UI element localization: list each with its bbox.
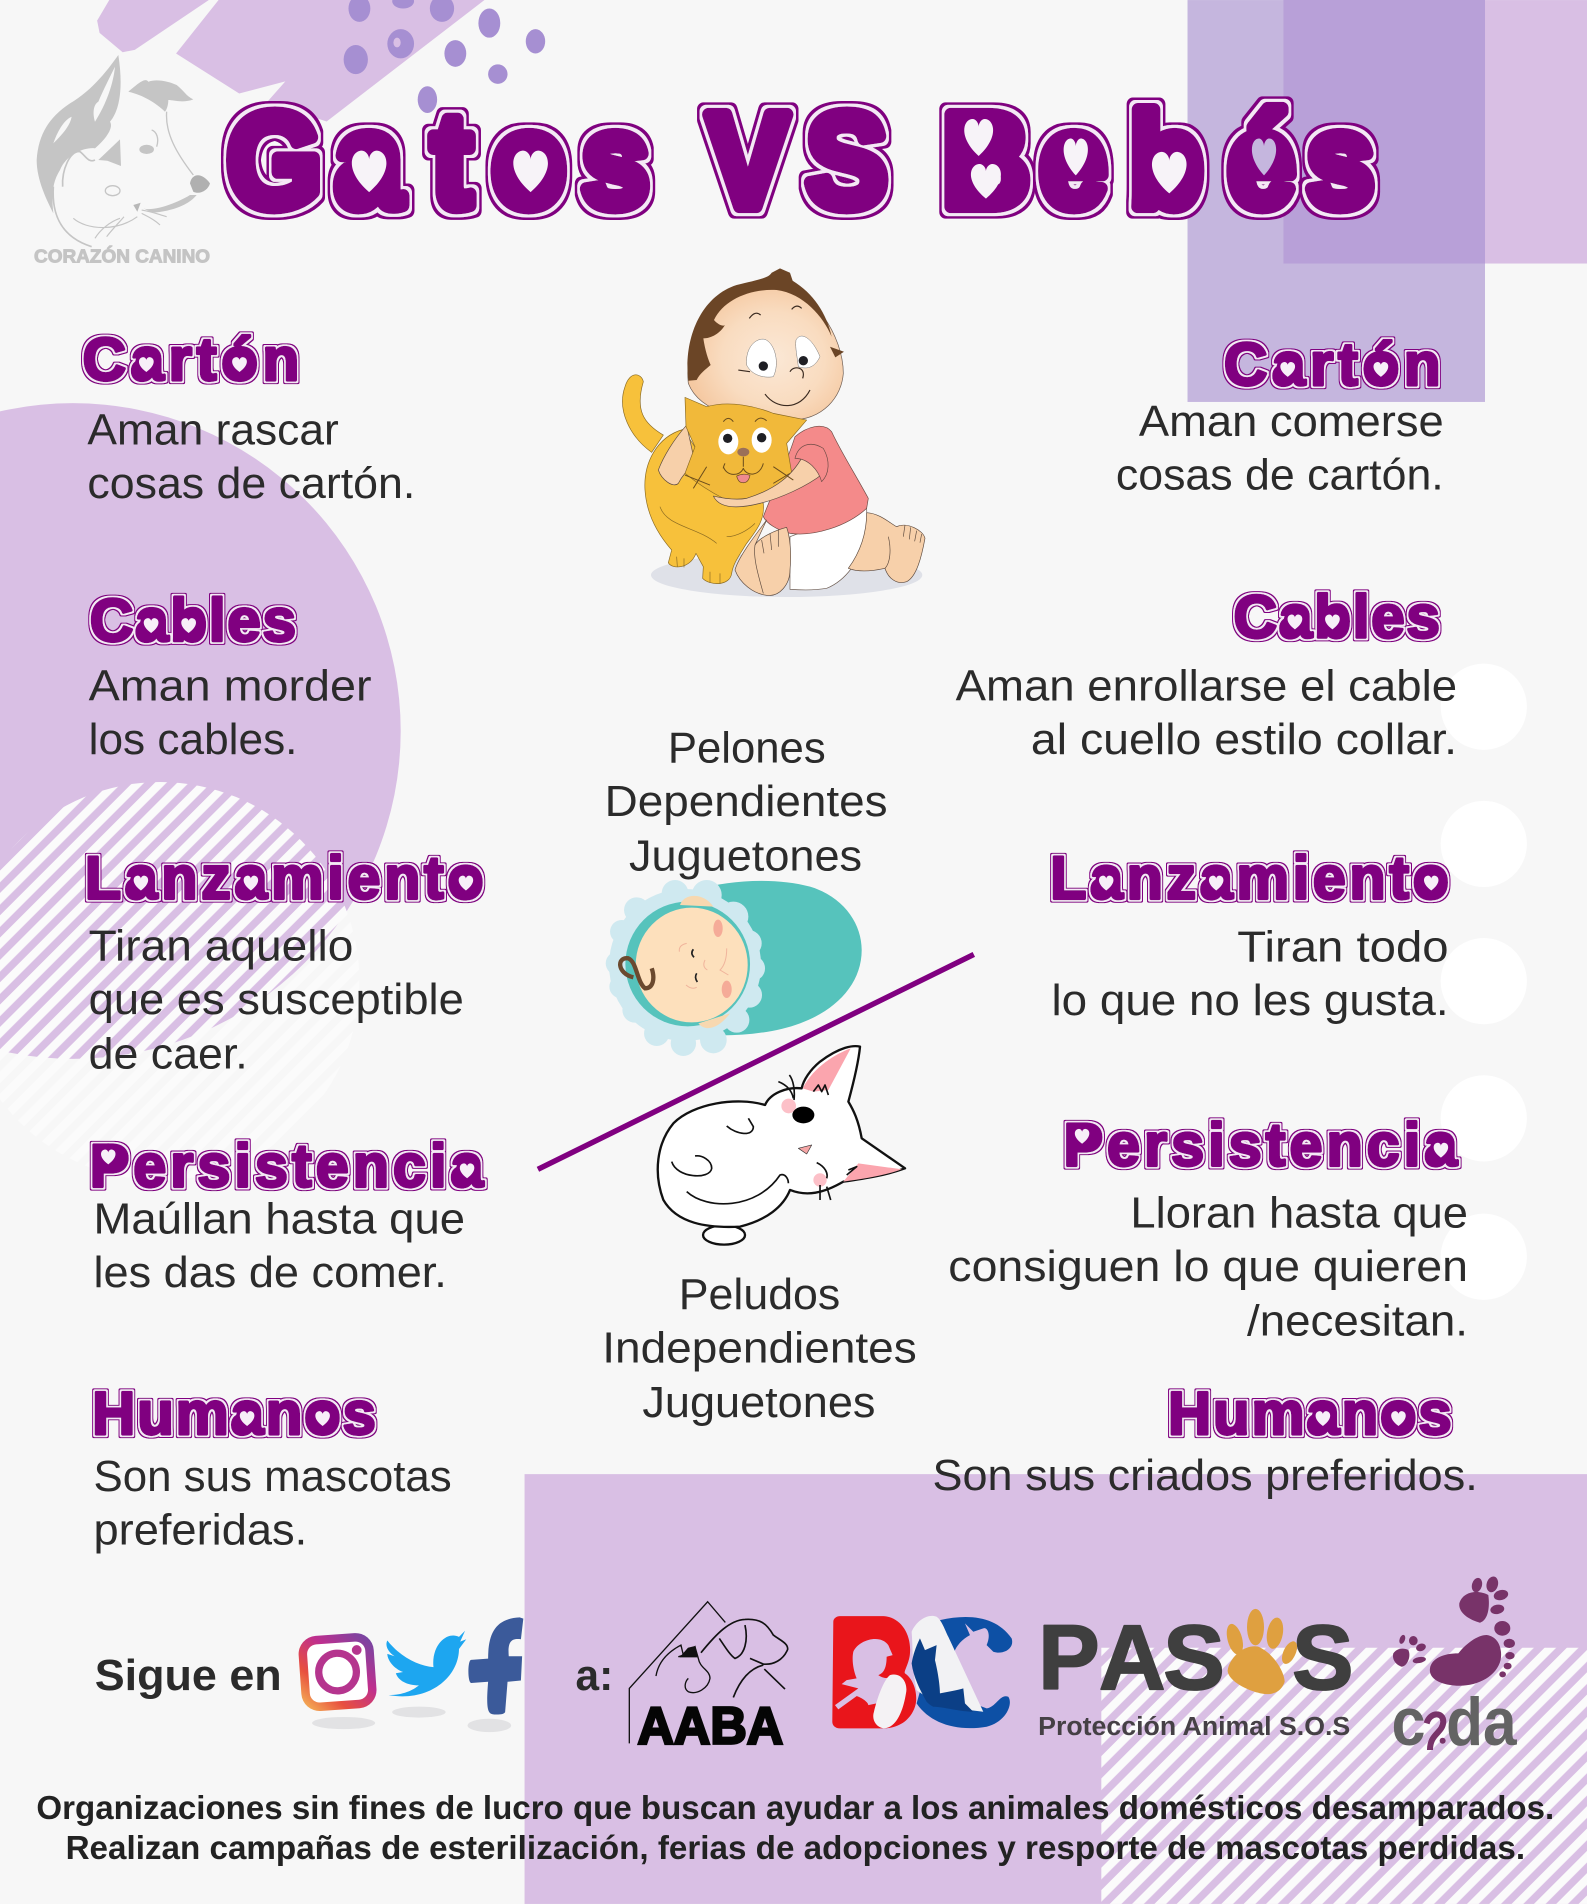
right column: Lanzamiento: Tiran todo (1237, 923, 1449, 972)
logo: Corazón Canino (34, 55, 210, 266)
left column: Cartón (83, 325, 415, 508)
right column: Cables: Aman enrollarse el cable (956, 662, 1457, 711)
logo: PASOS: PASS (1038, 1605, 1353, 1709)
cat tail (622, 375, 663, 452)
illustration: baby hugging cat (622, 268, 925, 597)
cat head (685, 397, 807, 500)
left column: Persistencia: Maúllan hasta que (93, 1195, 465, 1244)
title: Gatos (227, 86, 649, 236)
decoration: large lilac circle with striped circle (0, 403, 401, 1180)
left column: Humanos: preferidas. (93, 1506, 307, 1555)
decoration: top-left brush strokes and dots (97, 0, 545, 121)
right column: Lanzamiento (1050, 844, 1449, 1025)
icon: paw (1224, 1609, 1300, 1694)
decoration: top-right rectangles (1188, 0, 1587, 402)
baby hair (687, 268, 832, 381)
logo: BC (832, 1616, 1012, 1728)
left column: Cables: los cables. (89, 715, 297, 764)
title: Bebés (942, 86, 1374, 236)
footer text: Realizan campañas de esterilización, ferias de adopciones y resporte de mascotas perdidas. (66, 1830, 1525, 1867)
divider line (538, 954, 974, 1169)
right column: Humanos (933, 1380, 1478, 1500)
left column: Lanzamiento: que es susceptible (89, 975, 464, 1024)
decoration: bottom panel (525, 1474, 1587, 1904)
logo: Corazón Canino: CORAZÓN CANINO (34, 245, 210, 266)
center text: babies traits (605, 724, 888, 881)
left column: Lanzamiento (85, 844, 484, 1079)
baby eyes and mouth (746, 339, 776, 377)
right column: Persistencia (948, 1111, 1468, 1346)
cat body (645, 429, 764, 584)
left column: Humanos: Son sus mascotas (93, 1452, 452, 1501)
center text: cats traits: Juguetones (642, 1378, 875, 1427)
logo: PASOS: Protección Animal S.O.S (1038, 1713, 1350, 1741)
logo: AABA (629, 1602, 788, 1756)
dog ear (128, 80, 193, 112)
baby right arm (713, 452, 823, 507)
left column: Persistencia: Persistencia (90, 1132, 484, 1200)
title: VS (707, 86, 887, 236)
right column: Humanos: Humanos (1168, 1380, 1452, 1447)
right column: Cables: Cables (1234, 582, 1440, 651)
right column: Cartón: Cartón (1224, 330, 1441, 398)
left column: Cables: Cables (90, 586, 296, 654)
right column: Persistencia: Persistencia (1064, 1111, 1458, 1179)
left column: Lanzamiento: Tiran aquello (89, 921, 353, 970)
right column: Cables: al cuello estilo collar. (1031, 715, 1457, 764)
center text: babies traits: Juguetones (629, 832, 862, 881)
right column: Lanzamiento: Lanzamiento (1050, 844, 1449, 912)
logo: AABA: AABA (637, 1698, 783, 1756)
icon: twitter (386, 1631, 466, 1718)
follow label: Sigue en (95, 1651, 282, 1700)
right column: Lanzamiento: lo que no les gusta. (1052, 976, 1449, 1025)
icon: instagram (297, 1632, 378, 1729)
baby left foot (735, 520, 791, 595)
baby shirt (763, 426, 868, 534)
right column: Cables (956, 582, 1457, 764)
left column: Cartón: Aman rascar (87, 405, 339, 454)
logo: cida: da (1446, 1684, 1518, 1760)
cat (98, 139, 121, 166)
icon: facebook (467, 1617, 523, 1732)
right column: Cartón (1116, 330, 1444, 499)
left column: Cables: Aman morder (89, 662, 372, 711)
left column: Persistencia (90, 1132, 484, 1297)
logo: cida (1392, 1575, 1518, 1760)
dog lines (152, 112, 193, 175)
footer text: Organizaciones sin fines de lucro que buscan ayudar a los animales domésticos desamparados. (36, 1790, 1554, 1827)
baby head (688, 282, 843, 421)
decoration: white circles on right (1441, 664, 1527, 1300)
right column: Persistencia: /necesitan. (1247, 1297, 1468, 1346)
baby right leg (848, 513, 925, 583)
label: a: a: (576, 1651, 613, 1700)
left column: Lanzamiento: de caer. (89, 1030, 248, 1079)
left column: Humanos (92, 1380, 452, 1555)
center text: cats traits: Peludos (679, 1270, 840, 1319)
logo: cida: c (1392, 1684, 1426, 1760)
center text: cats traits: Independientes (602, 1323, 917, 1372)
left column: Persistencia: les das de comer. (93, 1248, 447, 1297)
left column: Cartón: Cartón (83, 325, 299, 393)
right column: Persistencia: Lloran hasta que (1130, 1189, 1468, 1238)
baby left arm (658, 425, 695, 485)
baby diaper (790, 508, 867, 590)
cat face (718, 429, 738, 454)
center text: babies traits: Dependientes (605, 777, 888, 826)
footer text (36, 1790, 1554, 1867)
newborn icon (606, 880, 862, 1056)
center text: babies traits: Pelones (668, 724, 826, 773)
left column: Cartón: cosas de cartón. (87, 459, 415, 508)
left column: Cables (89, 586, 372, 764)
right column: Persistencia: consiguen lo que quieren (948, 1242, 1468, 1291)
right column: Cartón: cosas de cartón. (1116, 450, 1444, 499)
left column: Humanos: Humanos (92, 1380, 376, 1447)
center text: cats traits (602, 1270, 917, 1427)
title (227, 86, 1374, 236)
left column: Lanzamiento: Lanzamiento (85, 844, 484, 912)
mane and ear (37, 55, 121, 213)
white cat icon (658, 1046, 905, 1245)
right column: Cartón: Aman comerse (1139, 397, 1444, 446)
right column: Humanos: Son sus criados preferidos. (933, 1451, 1478, 1500)
